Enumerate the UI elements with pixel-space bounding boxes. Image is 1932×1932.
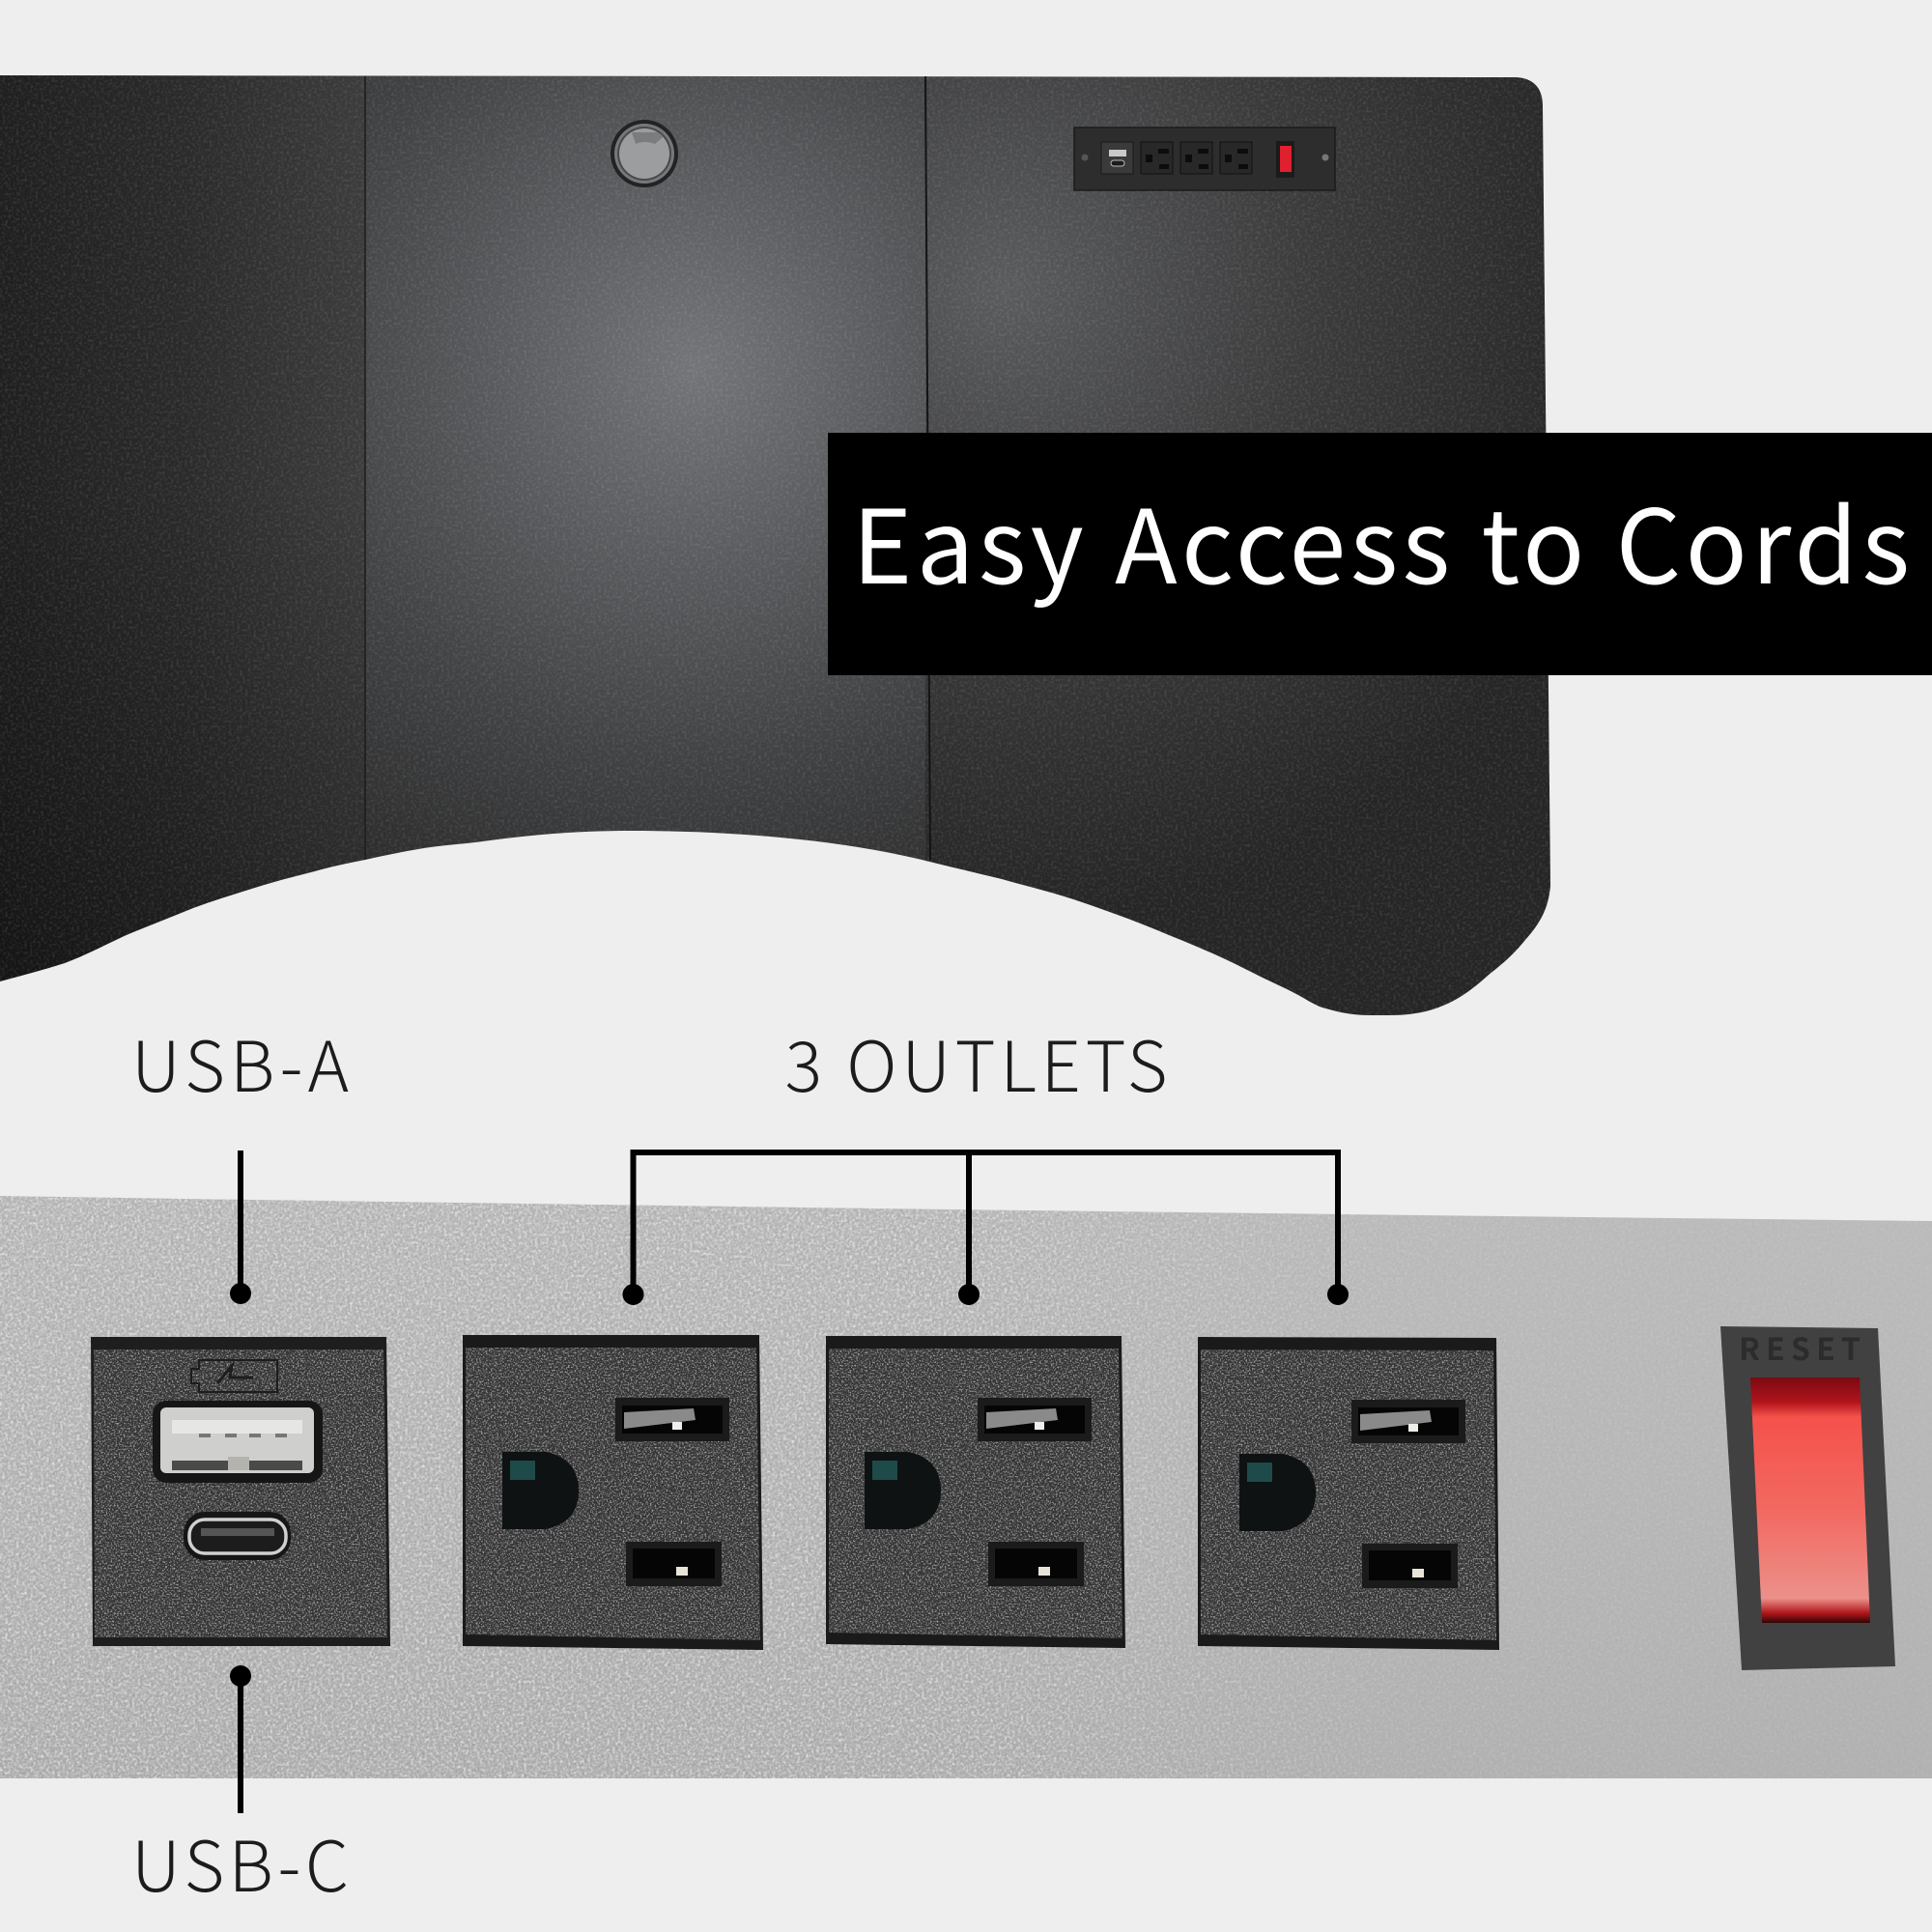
small power strip on desk	[1074, 128, 1335, 190]
hot slot	[1351, 1400, 1465, 1443]
reset text: RESET	[1739, 1325, 1861, 1370]
small outlet 1	[1141, 142, 1173, 174]
reset switch	[1720, 1325, 1895, 1670]
small outlet 3	[1220, 142, 1252, 174]
neutral slot	[1362, 1544, 1458, 1588]
leader: USB-C	[230, 1665, 251, 1813]
small red switch	[1276, 141, 1294, 178]
ground hole	[865, 1452, 941, 1529]
USB-C port	[184, 1512, 291, 1560]
icon: cable grommet	[611, 120, 678, 187]
label: USB-A: USB-A	[131, 1010, 349, 1112]
label: USB-C: USB-C	[131, 1810, 349, 1912]
USB module	[91, 1337, 390, 1646]
desk middle panel	[365, 75, 927, 862]
neutral slot	[988, 1542, 1084, 1586]
title banner	[828, 433, 1932, 675]
desk top photo	[0, 68, 1565, 1024]
hot slot	[615, 1398, 729, 1441]
ground hole	[502, 1452, 579, 1529]
outlet 1	[463, 1335, 763, 1650]
label: 3 outlets: 3 OUTLETS	[784, 1010, 1167, 1112]
small USB module	[1101, 142, 1133, 174]
desk left panel	[0, 68, 365, 995]
icon: battery charge	[191, 1360, 277, 1392]
USB-A port	[153, 1401, 323, 1483]
outlet 2	[826, 1336, 1125, 1648]
title: Easy Access to Cords	[852, 465, 1910, 613]
leader: USB-A	[230, 1151, 251, 1304]
ground hole	[1239, 1454, 1316, 1531]
power rail	[0, 1188, 1932, 1787]
neutral slot	[626, 1542, 722, 1586]
desk right panel	[925, 68, 1563, 1024]
bracket: 3 outlets	[622, 1152, 1349, 1305]
small outlet 2	[1180, 142, 1212, 174]
outlet 3	[1198, 1337, 1499, 1650]
hot slot	[978, 1398, 1092, 1441]
